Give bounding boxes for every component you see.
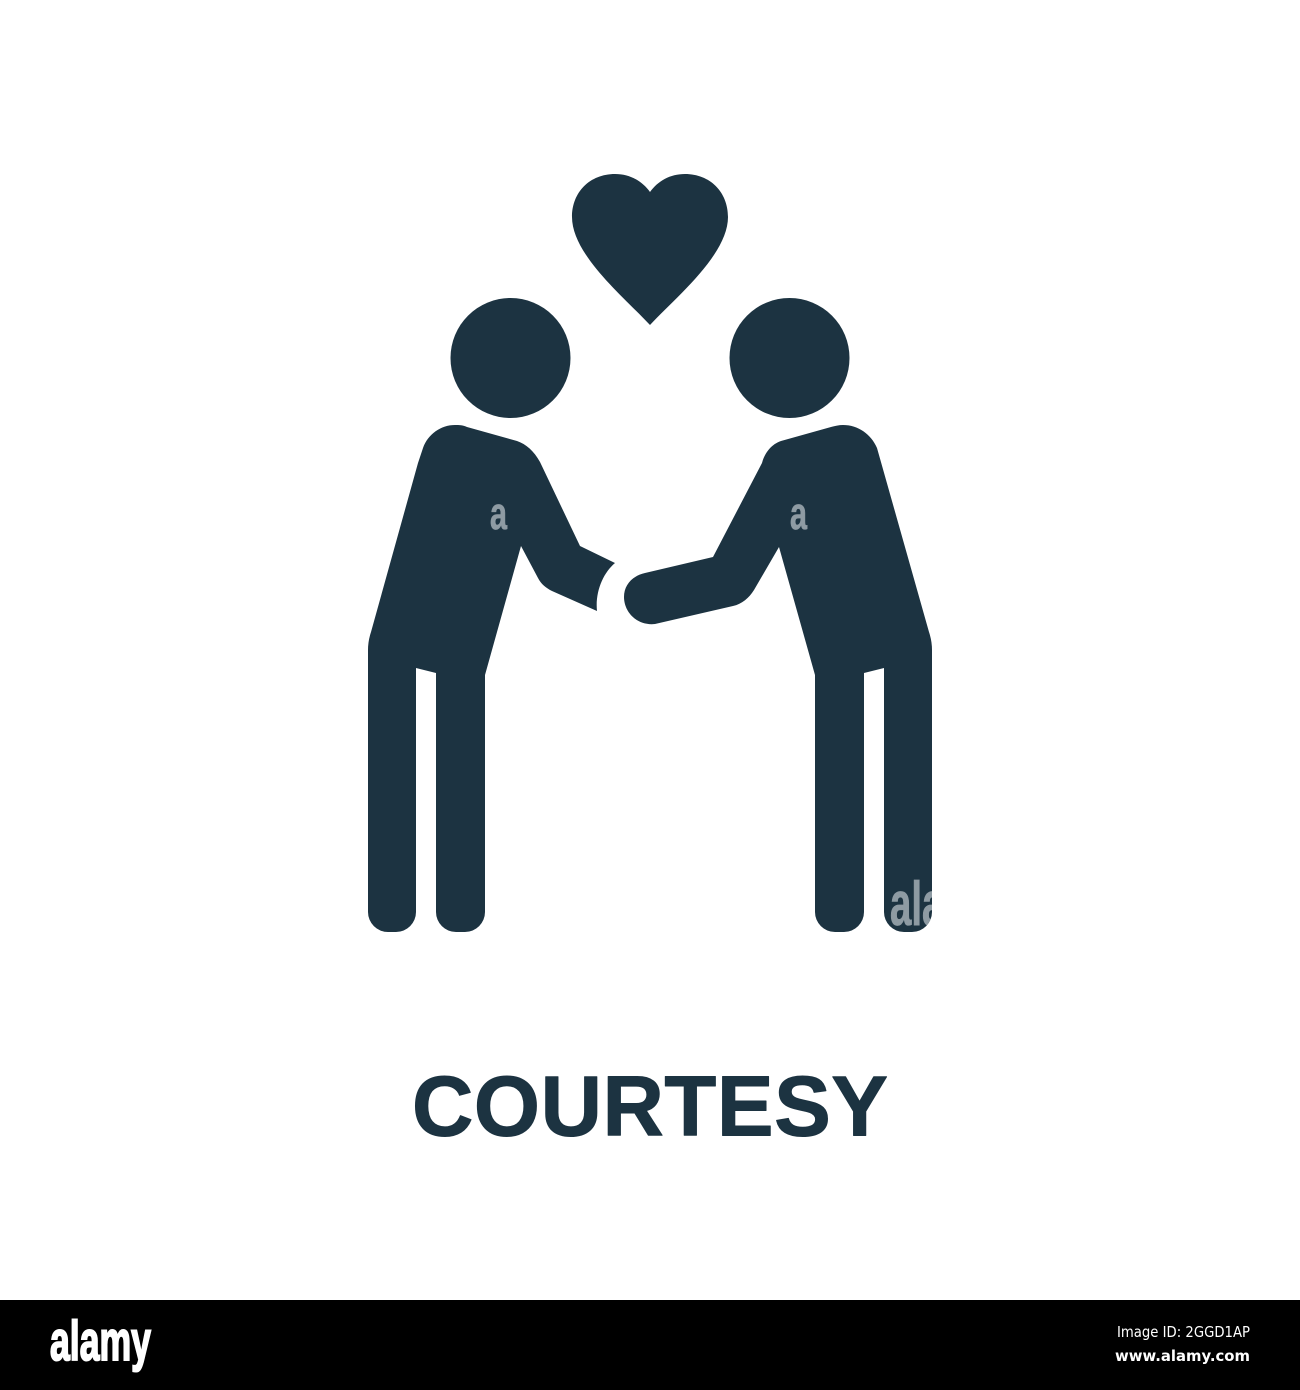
- footer: image id: Image ID: 2GGD1AP: [1117, 1323, 1250, 1341]
- title: courtesy: COURTESY: [412, 1060, 888, 1154]
- watermark: clipped logo on right leg: alamy: [890, 869, 999, 938]
- icon: right person: [624, 298, 932, 932]
- footer: alamy logo: alamy: [50, 1309, 151, 1372]
- icon: left person: [368, 298, 615, 932]
- left person head: [450, 298, 570, 418]
- right person head: [730, 298, 850, 418]
- footer: black bar: [0, 1300, 1300, 1390]
- left person body and legs: [368, 425, 615, 932]
- icon: heart: [572, 174, 728, 325]
- watermark: letter on right person: a: [790, 489, 807, 540]
- right person body and legs: [624, 425, 932, 932]
- footer: website: www.alamy.com: [1115, 1347, 1250, 1365]
- watermark: letter on left person: a: [490, 489, 507, 540]
